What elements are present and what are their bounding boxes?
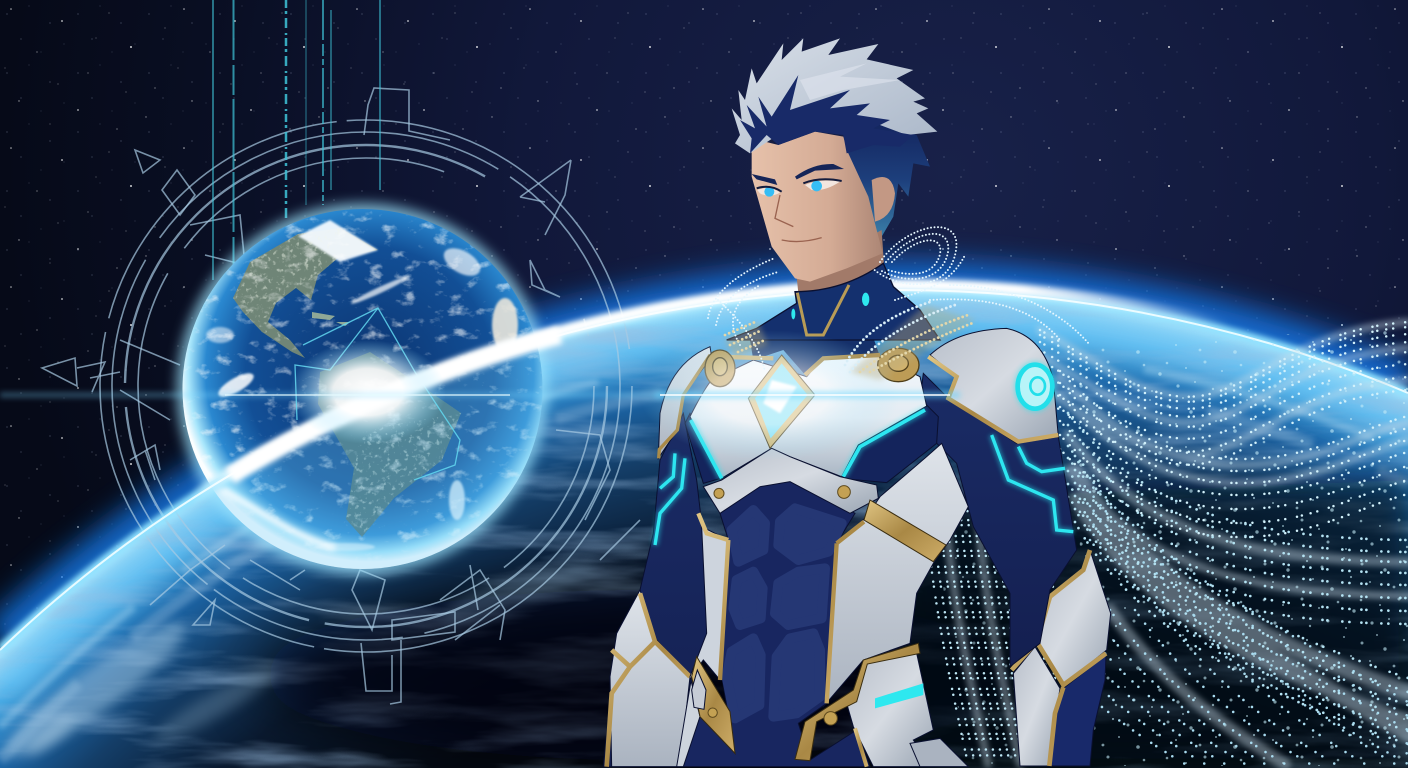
torso and arm bbox=[603, 300, 1077, 767]
right belt gold bbox=[795, 643, 920, 761]
harness rivets bbox=[714, 486, 850, 498]
dotted strands, lower bbox=[1010, 478, 1408, 764]
collar gold V bbox=[797, 285, 849, 335]
right torso side bbox=[823, 443, 968, 707]
left forearm gold trim bbox=[607, 593, 690, 767]
collar lights bbox=[791, 293, 869, 319]
hip armor bbox=[847, 653, 933, 767]
turbulent globe clouds bbox=[182, 209, 542, 569]
hip glow band bbox=[875, 683, 923, 708]
chest gem bbox=[748, 355, 815, 448]
planet Earth horizon bbox=[0, 285, 1408, 768]
right shoulder trim bbox=[928, 357, 1058, 442]
scattered particle field on the right bbox=[1078, 325, 1408, 766]
right forearm armor bbox=[1012, 550, 1111, 766]
neck bbox=[797, 230, 884, 293]
bright horizon arc in front of the globe bbox=[0, 285, 1408, 650]
scattered particle field behind the torso bbox=[935, 500, 1110, 766]
hero figure bbox=[603, 38, 1111, 767]
dotted strands, middle bbox=[1068, 413, 1408, 744]
left torso side bbox=[677, 527, 728, 767]
particle stream flowing behind the hero bbox=[900, 322, 1408, 768]
nose and mouth bbox=[775, 195, 822, 242]
shoulder studs bbox=[705, 348, 919, 387]
navy hair streaks bbox=[740, 75, 913, 153]
eyebrows bbox=[752, 164, 844, 185]
silver hair bbox=[732, 38, 937, 153]
eyes bbox=[757, 179, 842, 197]
polar cloud cap bbox=[298, 220, 378, 262]
hip panel bbox=[910, 738, 968, 767]
chest plate bbox=[690, 357, 927, 478]
falling data streams bbox=[213, 0, 380, 280]
abdominal muscle highlights bbox=[727, 508, 842, 718]
holographic globe bbox=[176, 203, 560, 580]
soft silver strands bbox=[945, 322, 1408, 764]
left forearm armor bbox=[610, 590, 690, 767]
continent: North America bbox=[233, 228, 378, 358]
HUD data rings around the globe bbox=[42, 88, 640, 704]
arm circuit lines bbox=[655, 435, 1073, 545]
chest light flare bbox=[640, 330, 960, 460]
chest circuit lines bbox=[691, 410, 925, 478]
left shoulder armor bbox=[658, 347, 712, 458]
left belt gold bbox=[692, 657, 735, 753]
right shoulder armor bbox=[930, 328, 1058, 443]
chest navy panels bbox=[685, 405, 938, 483]
gold suit trims bbox=[698, 513, 864, 703]
gold chest trim bbox=[717, 355, 880, 375]
abdominal suit bbox=[683, 480, 870, 767]
lower hip trim bbox=[855, 728, 867, 767]
dark backdrop of the stream bbox=[900, 480, 1408, 768]
harness bbox=[703, 448, 878, 513]
shoulder emblem bbox=[1014, 361, 1056, 412]
epaulet particle mantle bbox=[725, 302, 975, 372]
dotted strands, upper bbox=[1040, 322, 1408, 537]
dotted strands, cape behind torso bbox=[925, 505, 1087, 764]
left arm bbox=[603, 413, 708, 767]
collar bbox=[727, 263, 940, 340]
continent: South America bbox=[318, 352, 461, 537]
lens flare on the globe bbox=[0, 340, 700, 444]
face bbox=[752, 132, 883, 282]
hair silver highlights bbox=[800, 63, 900, 100]
head and collar bbox=[727, 38, 940, 340]
globe clouds bbox=[206, 242, 518, 551]
belt rivets bbox=[708, 708, 837, 725]
collar base bbox=[750, 300, 880, 377]
atmosphere haze over lower globe bbox=[210, 352, 542, 569]
ear bbox=[872, 177, 895, 222]
back of hair bbox=[843, 123, 930, 237]
left belt silver plate bbox=[692, 670, 706, 709]
left shoulder trim bbox=[659, 355, 710, 458]
wireframe triangles on globe bbox=[295, 308, 460, 480]
right arm bbox=[920, 373, 1077, 667]
land city lights bbox=[233, 228, 461, 537]
arm circuit glow bbox=[655, 435, 1073, 545]
gold strap bbox=[864, 500, 946, 562]
chest circuit glow bbox=[691, 410, 925, 478]
epaulet mantle haze bbox=[725, 305, 975, 380]
swirling particles around the neck and shoulders bbox=[708, 227, 1090, 380]
island chain bbox=[312, 312, 350, 326]
